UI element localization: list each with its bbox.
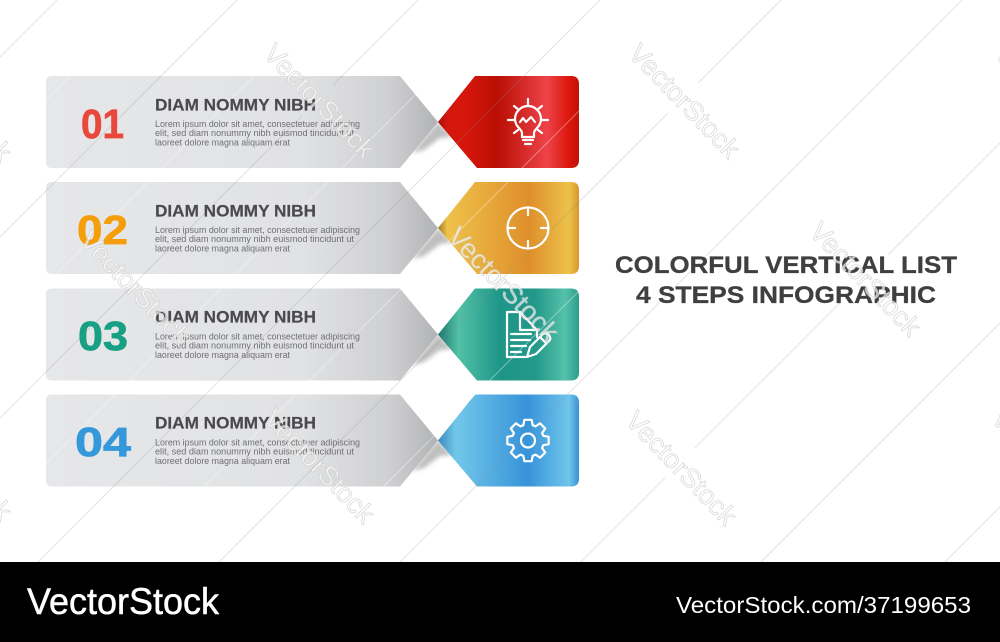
footer logo: VectorStock (27, 581, 219, 622)
panel: step 2 grey tab (46, 182, 438, 274)
watermarks: VectorStock (258, 403, 381, 530)
white diagonal lines on the panels (0, 0, 870, 562)
shadow: step 1 fold (412, 122, 452, 153)
panel: step 1 red tab (438, 76, 579, 168)
body text: step 2: Lorem ipsum dolor sit amet, consectetuer adipiscing (155, 225, 360, 235)
body text: step 2: laoreet dolore magna aliquam erat (155, 244, 290, 254)
watermarks: VectorStock (258, 38, 381, 165)
footer bar (0, 562, 1000, 642)
body text: step 2 (155, 225, 360, 254)
heading: step 3: DIAM NOMMY NIBH (155, 308, 316, 326)
body text: step 1: elit, sed diam nonummy nibh euismod tincidunt ut (155, 128, 354, 138)
step content: text and icons (75, 96, 550, 466)
panel: step 1 grey tab (46, 76, 438, 168)
heading: step 1: DIAM NOMMY NIBH (155, 96, 316, 114)
body text: step 1: laoreet dolore magna aliquam erat (155, 138, 290, 148)
watermarks (0, 38, 1000, 532)
body text: step 1: Lorem ipsum dolor sit amet, consectetuer adipiscing (155, 119, 360, 129)
body text: step 3: laoreet dolore magna aliquam erat (155, 350, 290, 360)
title: 4 STEPS INFOGRAPHIC (636, 282, 936, 309)
number 03: 03 (78, 313, 128, 359)
panel: step 2 gold tab (438, 182, 579, 274)
body text: step 2: elit, sed diam nonummy nibh euismod tincidunt ut (155, 234, 354, 244)
footer url: VectorStock.com/37199653 (676, 592, 971, 618)
watermarks: VectorStock (623, 38, 746, 165)
watermarks: VectorStock (620, 405, 743, 532)
panel: step 4 grey tab (46, 394, 438, 486)
body text: step 4: elit, sed diam nonummy nibh euismod tincidunt ut (155, 446, 354, 456)
shadow: step 2 fold (412, 228, 452, 259)
step 3 row (46, 288, 579, 380)
heading: step 4: DIAM NOMMY NIBH (155, 414, 316, 432)
panel: step 3 grey tab (46, 288, 438, 380)
icon: target (508, 208, 548, 248)
title: COLORFUL VERTICAL LIST (615, 252, 957, 279)
body text: step 3 (155, 332, 360, 360)
body text: step 3: elit, sed diam nonummy nibh euismod tincidunt ut (155, 340, 354, 350)
icon: light bulb (508, 99, 548, 144)
panel: step 4 blue tab (438, 394, 579, 486)
body text: step 3: Lorem ipsum dolor sit amet, consectetuer adipiscing (155, 332, 360, 342)
heading: step 2: DIAM NOMMY NIBH (155, 202, 316, 220)
title (615, 252, 957, 309)
watermarks: VectorStock (74, 225, 197, 352)
number 01: 01 (81, 101, 124, 147)
watermarks: VectorStock (804, 216, 927, 343)
number 04: 04 (75, 419, 131, 465)
step 4 row (46, 394, 579, 486)
body text: step 4: laoreet dolore magna aliquam erat (155, 456, 290, 466)
shadow: step 4 fold (412, 440, 452, 471)
number 02: 02 (77, 207, 128, 253)
panel: step 3 teal tab (438, 288, 579, 380)
body text: step 1 (155, 119, 360, 148)
body text: step 4 (155, 438, 360, 466)
icon: gear (507, 420, 549, 461)
shadow: step 3 fold (412, 334, 452, 365)
step 1 row (46, 76, 579, 168)
watermarks: VectorStock (442, 221, 565, 348)
icon: document and pencil (507, 312, 550, 357)
body text: step 4: Lorem ipsum dolor sit amet, consectetuer adipiscing (155, 438, 360, 448)
step 2 row (46, 182, 579, 274)
